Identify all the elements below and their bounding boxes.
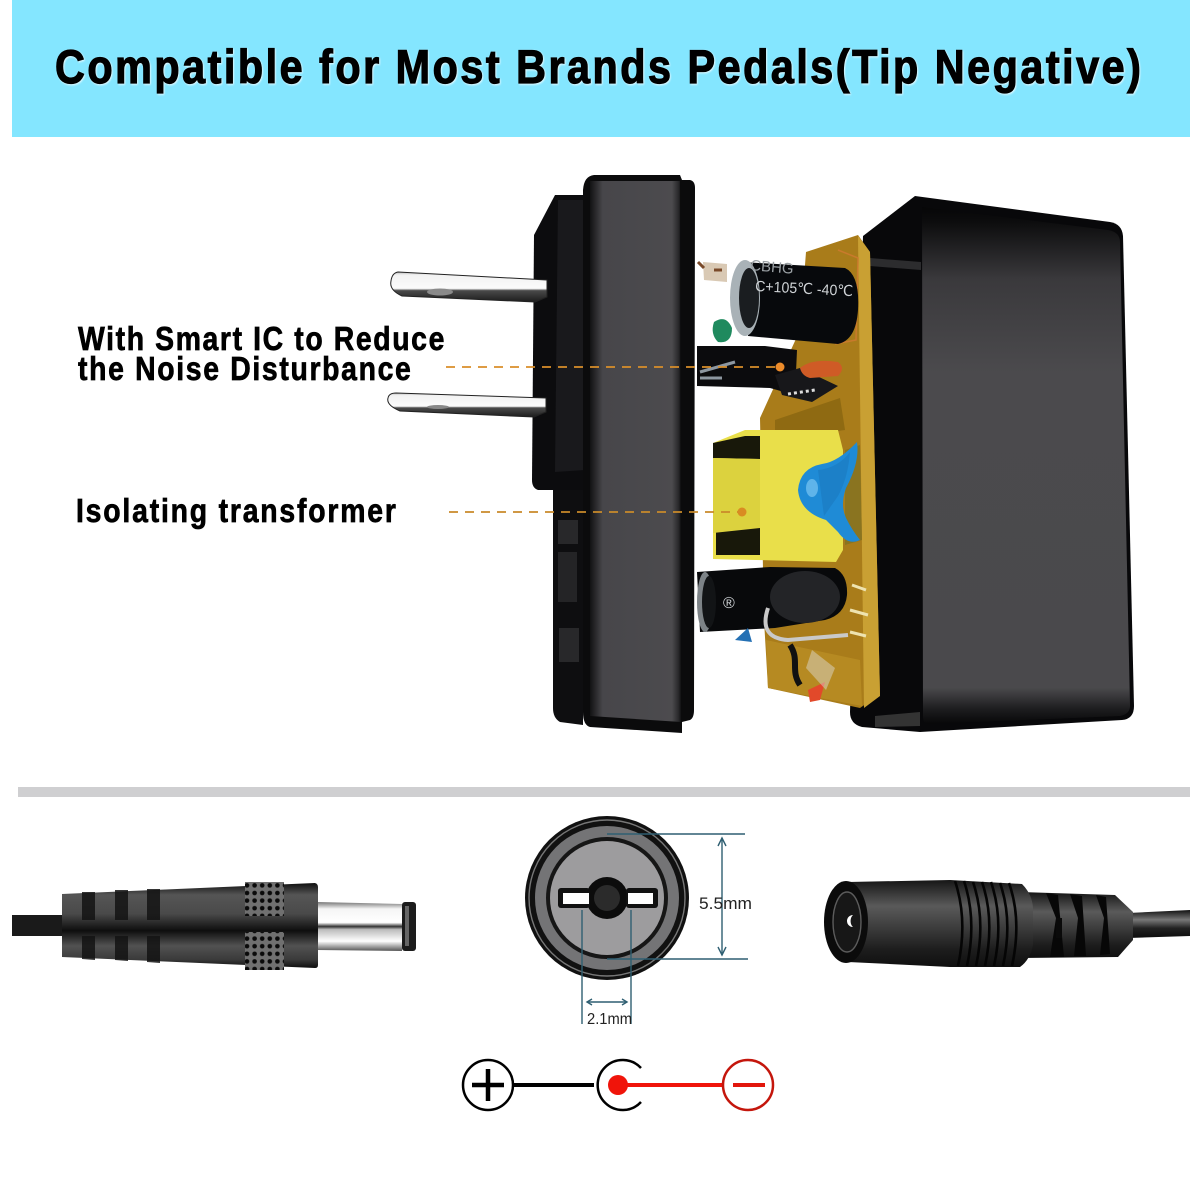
title banner: [12, 0, 1190, 137]
moulded label text: [558, 520, 579, 662]
label 2.1mm: 2.1mm: [587, 1011, 632, 1028]
circuit board: [760, 235, 880, 708]
callout text: smart IC: With Smart IC to Reduce: [78, 320, 444, 358]
callout: transformer line: [449, 508, 746, 516]
IC and second capacitor: [697, 346, 842, 402]
connector end view with dimensions: [525, 816, 752, 1028]
front housing face: [583, 175, 695, 733]
callout: noise disturbance line: [446, 362, 784, 372]
dimension: inner diameter: [582, 910, 631, 1024]
callout text: smart IC: [78, 320, 444, 388]
positive terminal: [463, 1060, 513, 1110]
male DC plug: [12, 882, 416, 970]
barrel symbol: [598, 1060, 641, 1110]
plug blades: [388, 272, 547, 417]
callout text: transformer: Isolating transformer: [76, 492, 396, 530]
top capacitor: CBHG: [750, 257, 794, 278]
exploded adapter illustration: [388, 175, 1134, 733]
title text: Compatible for Most Brands Pedals(Tip Negative): [55, 42, 1141, 94]
blue capacitor: [798, 442, 860, 542]
top capacitor: C+105℃ -40℃: [755, 278, 854, 300]
connector face: [525, 816, 689, 980]
divider: [18, 787, 1190, 797]
front housing back plate: [532, 195, 585, 725]
top capacitor: [698, 257, 858, 344]
female DC jack: [824, 880, 1190, 967]
bottom capacitor: [697, 567, 848, 642]
dimension: outer diameter: [607, 834, 748, 959]
rear case shell: [850, 196, 1134, 732]
negative terminal: [723, 1060, 773, 1110]
transformer: [713, 430, 843, 562]
red centre pin and wire: [608, 1075, 724, 1095]
black wire: [513, 1083, 594, 1087]
polarity diagram: [463, 1060, 773, 1110]
label 5.5mm: 5.5mm: [699, 895, 752, 913]
callout text: smart IC: the Noise Disturbance: [78, 350, 411, 388]
bottom capacitor: ®: [723, 595, 735, 612]
